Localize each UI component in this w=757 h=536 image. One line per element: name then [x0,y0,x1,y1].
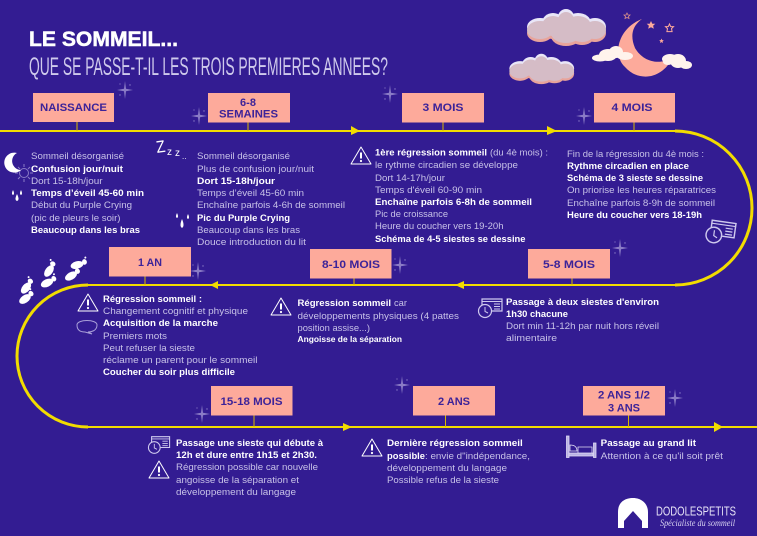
text: 1 an: Premiers mots [103,331,167,342]
icon: zzz [155,137,186,161]
icon: tears [12,190,22,201]
text: naissance: Dort 15-18h/jour [31,176,102,187]
label: 3 mois [402,93,484,122]
text: 6-8 semaines: Beaucoup dans les bras [197,225,300,236]
text: 3 mois: Pic de croissance [375,209,448,220]
text: 2 ans: Possible refus de la sieste [387,475,499,486]
text: 4 mois: Rythme circadien en place [567,161,689,172]
text: 1 an: Changement cognitif et physique [103,306,248,317]
text: 15-18 mois: Passage une sieste qui débute à [176,438,324,449]
label: 5-8 mois [528,249,610,278]
icon: bed [566,436,596,458]
text: naissance: Sommeil désorganisé [31,151,124,162]
label: 2 ans et demi - 3 ans: 2 ANS 1/2 [598,390,650,402]
text: 6-8 semaines: Pic du Purple Crying [197,213,290,224]
text: naissance: Beaucoup dans les bras [31,225,140,236]
text: 8-10 mois: Régression sommeil [298,298,391,309]
label: 2 ans [413,386,495,416]
icon: warning [271,298,291,315]
text: naissance: Début du Purple Crying [31,200,132,211]
icon: calendar clock [705,220,736,246]
text: 2 ans: Dernière régression sommeil [387,438,523,449]
logo [618,498,736,528]
text: 4 mois [567,149,716,221]
label: 6-8 semaines: 6-8 [240,97,256,109]
label: 1 an [109,247,191,276]
icon: speech bubble [77,320,97,334]
text: 4 mois: Schéma de 3 sieste se dessine [567,173,703,184]
text: 8-10 mois: Angoisse de la séparation [298,335,402,344]
icon: zzz: z [175,148,180,159]
text: 4 mois: Enchaîne parfois 8-9h de sommeil [567,198,715,209]
icon: calendar clock [148,437,170,453]
illustration: clouds and moon [509,9,692,84]
label: 1 an: 1 AN [138,257,162,269]
text: 15-18 mois: Régression possible car nouvelle [176,462,318,473]
text: 1 an: Acquisition de la marche [103,318,218,329]
text: 15-18 mois: 12h et dure entre 1h15 et 2h30. [176,450,317,461]
text: 3 mois: Dort 14-17h/jour [375,173,445,184]
label: 6-8 semaines [208,93,290,122]
text: 4 mois: On priorise les heures réparatrices [567,185,716,196]
text: 3 mois: Enchaîne parfois 6-8h de sommeil [375,197,532,208]
icon: footprints [16,256,89,306]
text: naissance: Confusion jour/nuit [31,164,124,175]
label: 15-18 mois [211,386,292,416]
title [29,28,388,81]
text: 8-10 mois: car [394,298,407,309]
label: 2 ans et demi - 3 ans [583,386,665,416]
text: 2 ans: : envie d"indépendance, [425,451,530,462]
text: 8-10 mois: position assise...) [298,323,370,334]
text: 2 ans: possible [387,451,425,462]
label: 4 mois [594,93,675,122]
text: 15-18 mois [176,438,324,498]
text: 6-8 semaines [197,151,345,248]
text: 2 ans et demi - 3 ans: Passage au grand lit [601,438,697,449]
icon: tears [176,213,189,228]
text: 2 ans et demi - 3 ans [601,438,723,462]
text: 8-10 mois: développements physiques (4 pattes [298,311,459,322]
text: 5-8 mois [506,297,659,344]
text: 3 mois: (du 4è mois) : [490,148,548,158]
icon: calendar clock [478,299,502,318]
label: 15-18 mois: 15-18 MOIS [220,396,282,408]
label: 4 mois: 4 MOIS [612,102,652,114]
icon: warning [362,439,382,456]
icon: warning [78,294,98,311]
text: 3 mois: Schéma de 4-5 siestes se dessine [375,234,526,245]
label: naissance [33,93,114,122]
text: 4 mois: Fin de la régression du 4è mois : [567,149,704,160]
text: 3 mois: Temps d'éveil 60-90 min [375,185,482,196]
icon: warning [149,461,169,478]
text: 6-8 semaines: Douce introduction du lit [197,237,306,248]
timeline path [0,122,757,432]
text: 1 an: Régression sommeil : [103,294,202,305]
label: 8-10 mois [310,249,392,278]
text: 5-8 mois: 1h30 chacune [506,309,568,320]
text: 6-8 semaines: Temps d’éveil 45-60 min [197,188,304,199]
text: 5-8 mois: Passage à deux siestes d'environ [506,297,659,308]
logo: Spécialiste du sommeil [660,518,735,528]
icon: warning [351,147,371,164]
text: 2 ans [387,438,530,486]
text: 6-8 semaines: Plus de confusion jour/nuit [197,164,314,175]
text: 1 an: réclame un parent pour le sommeil [103,355,258,366]
text: 4 mois: Heure du coucher vers 18-19h [567,210,702,221]
text: 2 ans et demi - 3 ans: Attention à ce qu'il soit prêt [601,451,723,462]
text: 3 mois: le rythme circadien se développe [375,160,518,171]
text: naissance [31,151,144,236]
icon: moon and sun [4,153,33,182]
text: 5-8 mois: alimentaire [506,333,557,344]
text: 1 an: Peut refuser la sieste [103,343,195,354]
text: 3 mois: Heure du coucher vers 19-20h [375,221,504,232]
text: 5-8 mois: Dort min 11-12h par nuit hors réveil [506,321,659,332]
icon: zzz: .. [182,152,186,161]
text: 3 mois [375,148,548,245]
label: 2 ans: 2 ANS [438,396,470,408]
text: 1 an [103,294,258,378]
text: 3 mois: 1ère régression sommeil [375,148,487,158]
text: 2 ans: développement du langage [387,463,507,474]
label: 8-10 mois: 8-10 MOIS [322,259,380,271]
label: 5-8 mois: 5-8 MOIS [543,259,595,271]
title: QUE SE PASSE-T-IL LES TROIS PREMIERES ANNEES? [29,53,388,81]
text: 1 an: Coucher du soir plus difficile [103,367,235,378]
text: 6-8 semaines: Enchaîne parfois 4-6h de sommeil [197,200,345,211]
text: 6-8 semaines: Dort 15-18h/jour [197,176,275,187]
title: LE SOMMEIL... [29,28,178,51]
icon: zzz: z [167,147,172,158]
text: naissance: (pic de pleurs le soir) [31,213,120,224]
text: 15-18 mois: angoisse de la séparation et [176,475,299,486]
text: 15-18 mois: développement du langage [176,487,296,498]
text: 6-8 semaines: Sommeil désorganisé [197,151,290,162]
text: 8-10 mois [298,298,459,344]
label: 2 ans et demi - 3 ans: 3 ANS [608,402,640,414]
text: naissance: Temps d’éveil 45-60 min [31,188,144,199]
icon: zzz: Z [155,137,166,157]
sparkle stars [117,81,683,423]
label: naissance: NAISSANCE [40,102,107,114]
label: 3 mois: 3 MOIS [422,102,464,114]
label: 6-8 semaines: SEMAINES [219,108,278,120]
